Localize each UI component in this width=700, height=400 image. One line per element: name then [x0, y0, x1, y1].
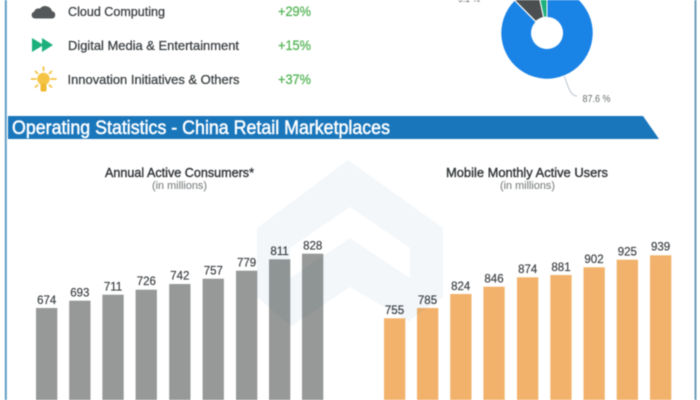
bar values: 785	[418, 295, 437, 307]
segment row: innovation initiatives	[32, 67, 311, 92]
segment row: digital media	[32, 38, 311, 53]
chart: mobile monthly active users	[384, 165, 671, 400]
bars	[384, 255, 671, 400]
bar values: 902	[584, 254, 604, 266]
section heading banner	[8, 116, 659, 139]
banner shape	[8, 116, 659, 139]
bar values: 757	[204, 266, 223, 278]
watermark logo	[257, 160, 443, 327]
icon: cloud	[32, 6, 55, 18]
bar values: 874	[518, 264, 538, 276]
chart title: Mobile Monthly Active Users	[446, 165, 608, 180]
bar values: 824	[451, 281, 471, 293]
segment row: cloud computing	[32, 4, 311, 19]
label: innovation initiatives: Innovation Initiatives & Others	[68, 72, 240, 87]
bar values: 881	[551, 262, 571, 274]
growth: cloud computing: +29%	[278, 4, 311, 19]
bar values: 811	[270, 246, 289, 258]
bar values: 828	[303, 240, 322, 252]
slice: blue 87.6 percent	[501, 0, 593, 79]
icon: fast forward arrows	[32, 38, 53, 52]
left frame border	[5, 0, 7, 400]
bar values	[385, 242, 670, 317]
bar values: 779	[237, 258, 256, 270]
bars	[36, 254, 323, 400]
bar values: 925	[618, 246, 637, 258]
slice: dark grey	[515, 0, 544, 22]
growth: digital media: +15%	[278, 38, 311, 53]
bar values: 711	[104, 282, 122, 294]
slice: green	[538, 0, 547, 17]
chart title: Annual Active Consumers*	[105, 165, 254, 180]
heading text: Operating Statistics - China Retail Marketplaces	[12, 117, 390, 139]
bar values: 939	[651, 242, 670, 254]
chart subtitle: (in millions)	[500, 180, 555, 192]
label: 87.6 percent: 87.6 %	[582, 94, 611, 105]
donut chart	[458, 0, 611, 105]
bar values: 755	[385, 305, 404, 317]
label: cloud computing: Cloud Computing	[68, 4, 165, 19]
bar values: 846	[484, 274, 504, 286]
bar values: 674	[37, 295, 57, 307]
right frame border	[694, 0, 696, 400]
chart: annual active consumers	[36, 165, 323, 400]
bar values: 742	[170, 270, 189, 282]
growth: innovation initiatives: +37%	[278, 72, 311, 87]
label: digital media: Digital Media & Entertainment	[68, 38, 239, 53]
bar values: 693	[70, 288, 89, 300]
chart subtitle: (in millions)	[152, 180, 207, 192]
bar values	[37, 240, 322, 307]
icon: light bulb	[32, 67, 56, 92]
bar values: 726	[137, 276, 156, 288]
leader line	[564, 76, 577, 96]
